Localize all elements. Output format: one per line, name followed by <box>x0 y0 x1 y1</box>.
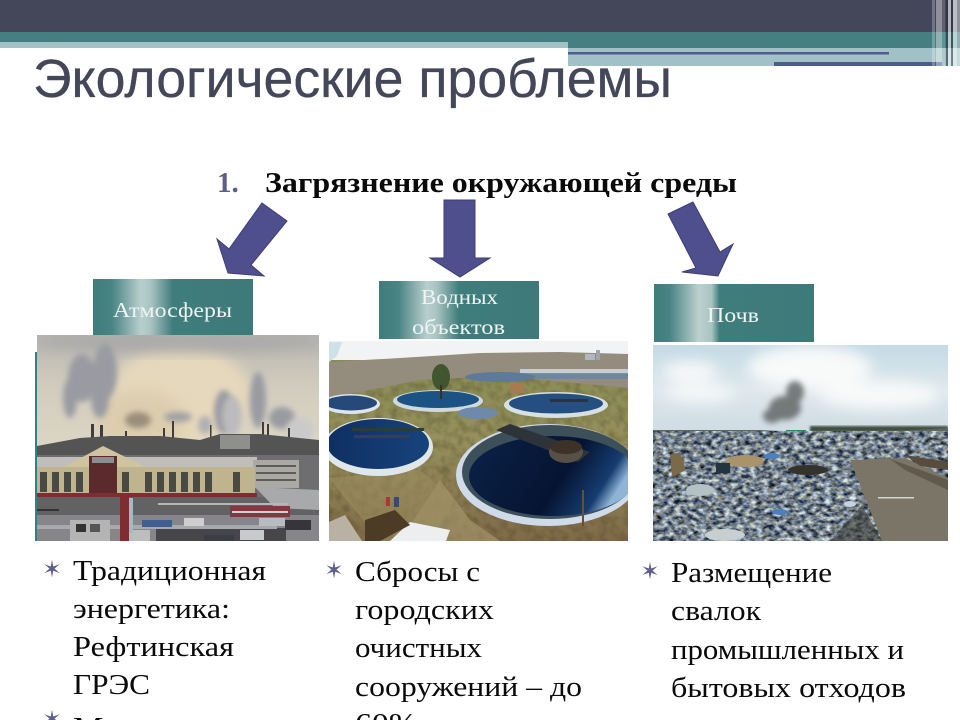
chimneys <box>91 421 290 438</box>
bullet list: atmosphere: энергетика: <box>73 594 230 625</box>
label: water bodies: объектов <box>412 315 505 339</box>
garbage field <box>653 428 948 541</box>
tree <box>432 364 450 399</box>
label: water bodies <box>379 281 539 339</box>
large left tank <box>323 418 433 476</box>
subtitle: Загрязнение окружающей среды <box>265 167 737 199</box>
bullet list: water: ✶ <box>324 558 344 584</box>
label: atmosphere: Атмосферы <box>113 298 232 322</box>
bullet list: atmosphere <box>42 556 266 720</box>
photo: garbage landfill <box>653 345 948 541</box>
bullet list: water: очистных <box>355 633 482 664</box>
bullet list: atmosphere: Рефтинская <box>73 632 234 663</box>
bullet list: soil <box>640 558 906 704</box>
bullet list: water: городских <box>355 595 494 626</box>
photo: industrial smoke over city <box>30 332 330 541</box>
title: Экологические проблемы <box>33 49 672 109</box>
bullet list: water <box>324 557 582 720</box>
bullet list: soil: Размещение <box>671 558 832 589</box>
bullet list: atmosphere: Традиционная <box>73 556 266 587</box>
bullet list: soil: бытовых отходов <box>671 673 906 704</box>
small tank center <box>458 407 498 419</box>
dirt road <box>850 458 948 541</box>
smoke <box>763 381 804 423</box>
bullet list: atmosphere: ГРЭС <box>73 670 150 701</box>
large foreground tank <box>456 424 640 526</box>
bullet list: soil: свалок <box>671 596 761 627</box>
litter patches <box>726 455 764 467</box>
left tank <box>329 394 380 414</box>
bullet list: water: Сбросы с <box>355 557 480 588</box>
right tank <box>504 392 608 418</box>
bullet list: soil: промышленных и <box>671 635 904 666</box>
foreground debris <box>329 515 362 541</box>
label: atmosphere <box>93 279 253 336</box>
arrow: to soil <box>668 202 733 276</box>
label: soil: Почв <box>707 303 759 327</box>
label: soil <box>654 284 814 342</box>
photo: wastewater treatment tanks <box>322 341 640 541</box>
middle tank <box>393 390 483 412</box>
bullet list: atmosphere: ✶ <box>42 557 62 583</box>
arrow: to atmosphere <box>217 203 287 276</box>
subtitle number: 1. <box>217 167 239 199</box>
distant tanks <box>470 374 628 379</box>
header band <box>0 0 960 66</box>
bullet list: water: сооружений – до <box>355 672 582 703</box>
label: water bodies: Водных <box>421 285 499 309</box>
arrow: to water <box>430 200 490 277</box>
bullet list: soil: ✶ <box>640 559 660 585</box>
